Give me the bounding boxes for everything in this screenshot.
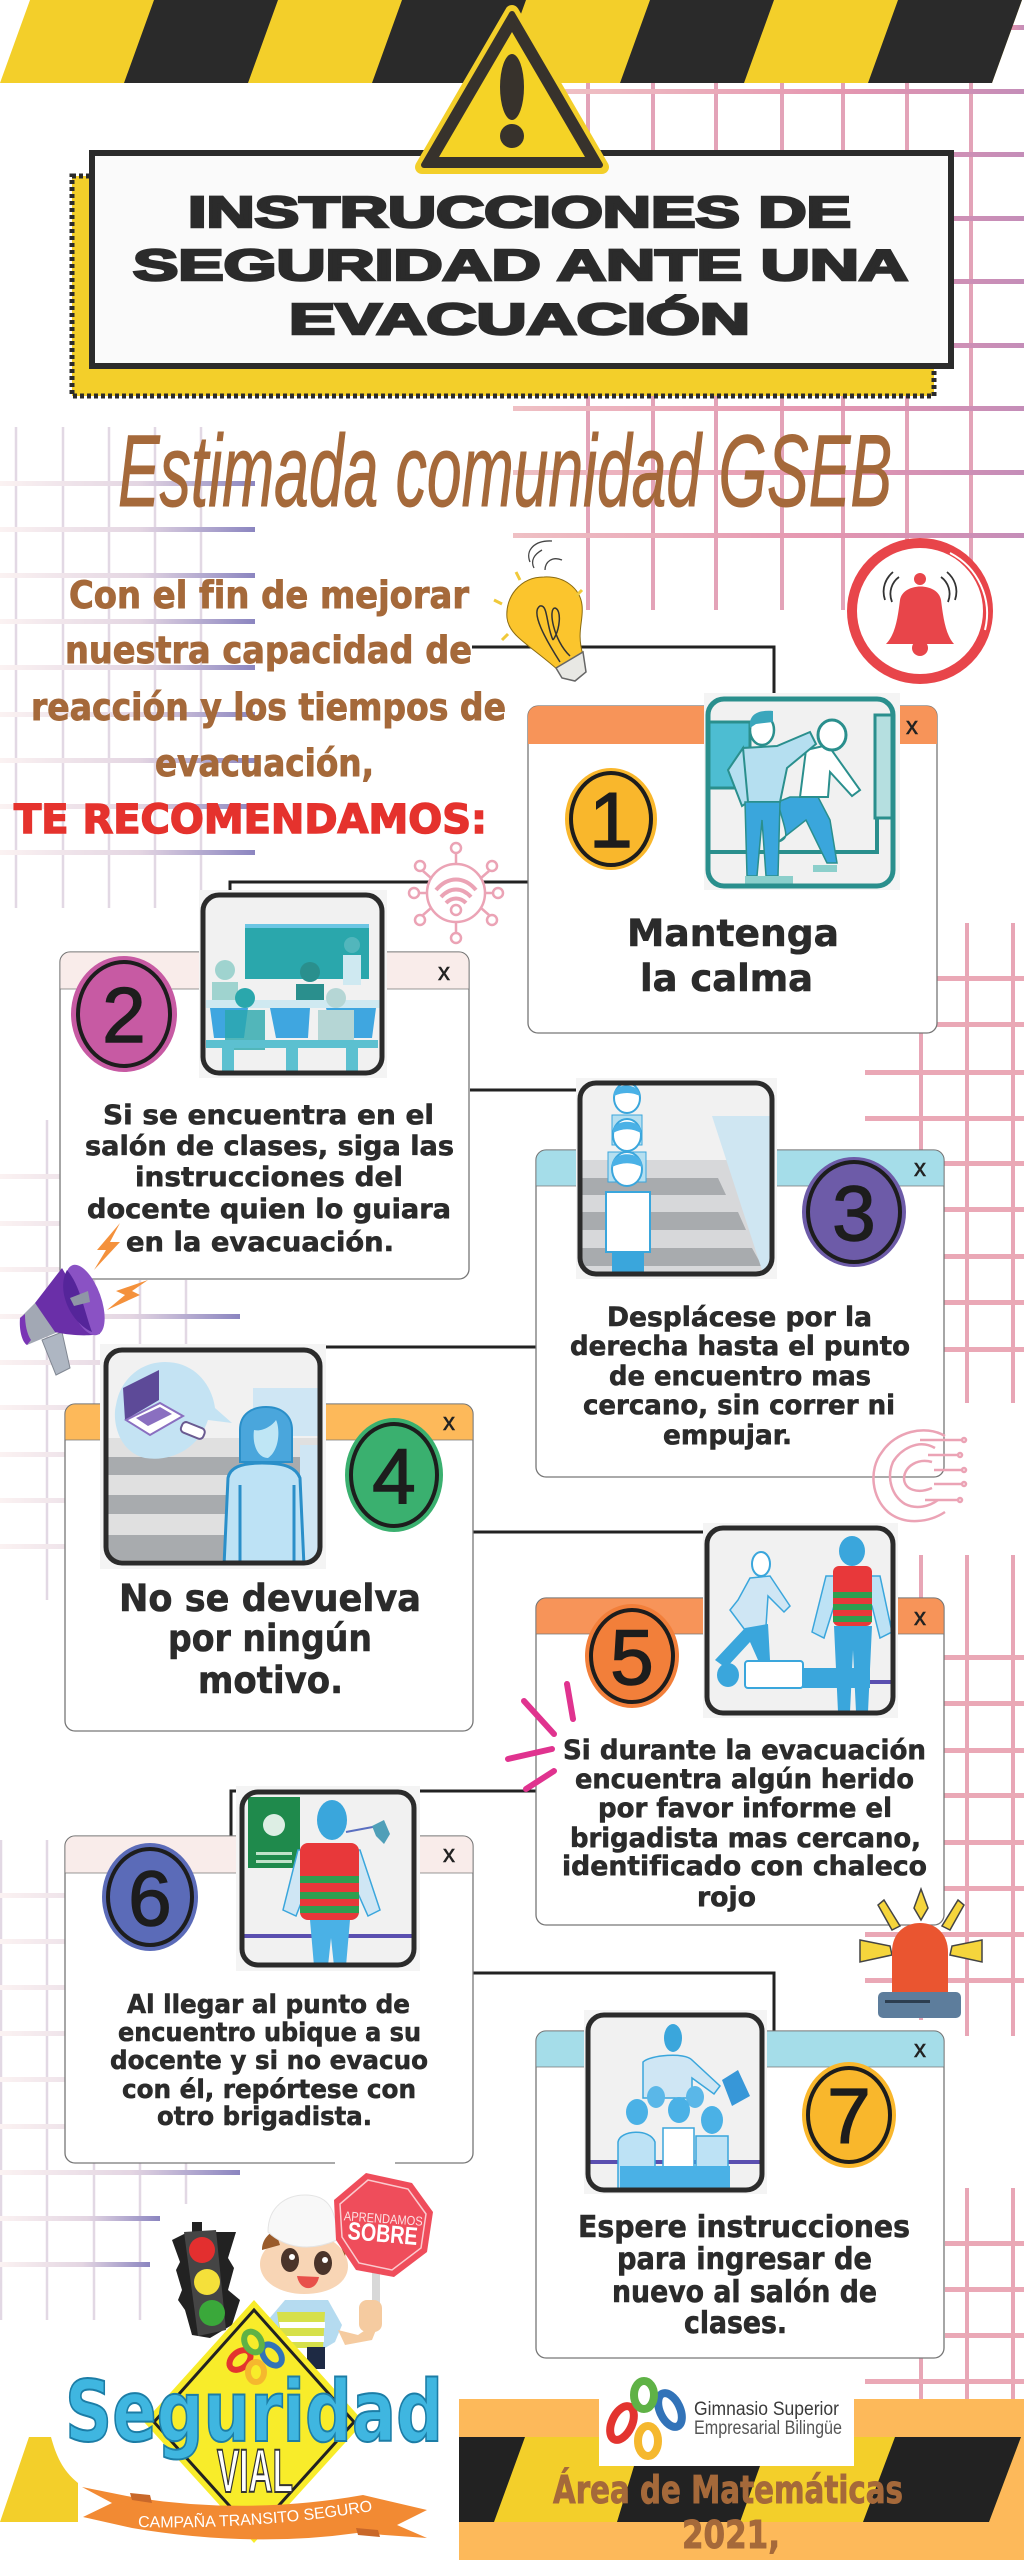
footer: right orange panel with hazard stripe [440, 2399, 1024, 2560]
step 7 illustration: wait for instructions [584, 2010, 767, 2194]
step 6 illustration: meeting point [236, 1786, 420, 1971]
step 7 text: clases. [684, 2306, 787, 2341]
step 5 text: brigadista mas cercano, [570, 1823, 921, 1854]
step 6 text: Al llegar al punto de [127, 1990, 410, 2020]
step 4 illustration: do not go back [100, 1344, 326, 1569]
step 7 text: nuevo al salón de [612, 2275, 877, 2310]
background grid: left lilac, third [0, 1840, 240, 2320]
step 6 number badge: 6 [128, 1854, 172, 1942]
icon: circuit gear [873, 1430, 966, 1521]
step 6 text: docente y si no evacuo [110, 2046, 428, 2076]
step 3 card [536, 1078, 944, 1477]
step 3 number badge [802, 1157, 906, 1267]
step 2 text [85, 1100, 454, 1258]
logo: Seguridad Vial campaign [65, 2300, 443, 2543]
step 7 number badge [802, 2062, 896, 2168]
step 1 card [528, 693, 937, 1033]
step 4 text: motivo. [198, 1659, 343, 1702]
icon: warning triangle [422, 12, 602, 167]
step 1 card: x [906, 713, 918, 740]
logo: Seguridad Vial campaign: VIAL [217, 2437, 293, 2505]
intro text: evacuación, [155, 742, 374, 785]
background grid: right pink, second [865, 923, 1024, 1403]
step 3 illustration: single file [576, 1078, 777, 1282]
title panel [92, 153, 951, 366]
step 6 card [65, 1786, 473, 2163]
step 6 number badge [102, 1843, 198, 1951]
step 5 text: por favor informe el [598, 1793, 892, 1824]
icon: light bulb [494, 541, 586, 681]
intro text: nuestra capacidad de [65, 629, 472, 672]
step 4 text: No se devuelva [119, 1577, 421, 1620]
step 5 text: identificado con chaleco [562, 1851, 927, 1882]
icon: alarm bell [852, 543, 988, 679]
step 6 text: otro brigadista. [157, 2102, 372, 2132]
title text: EVACUACIÓN [289, 294, 750, 344]
step 5 card: x [914, 1604, 926, 1631]
title text: INSTRUCCIONES DE [188, 188, 851, 237]
step 1 text: la calma [640, 957, 813, 1000]
step 4 card [65, 1344, 473, 1731]
step 7 text: para ingresar de [617, 2242, 872, 2277]
background grid: left lilac, second [0, 1120, 240, 1600]
step 2 text: salón de clases, siga las [85, 1131, 454, 1162]
step 6 text: con él, repórtese con [122, 2075, 416, 2105]
footer: left white backing [0, 2205, 459, 2560]
step 2 text: Si se encuentra en el [103, 1100, 434, 1131]
step 1 text [627, 912, 839, 1000]
intro text: reacción y los tiempos de [31, 686, 506, 729]
background grid: right pink, third [865, 1555, 1024, 2036]
icon: megaphone [20, 1260, 113, 1375]
stop sign: APRENDAMOS [343, 2208, 424, 2229]
step 3 text: cercano, sin correr ni [583, 1390, 895, 1421]
background grid: right pink, bottom [865, 2188, 1024, 2400]
step 3 number badge: 3 [832, 1169, 876, 1257]
step 1 illustration: calm walk [704, 693, 900, 890]
step 4 number badge: 4 [372, 1432, 416, 1520]
step 5 text: encuentra algún herido [575, 1764, 914, 1795]
step 5 text: rojo [697, 1882, 756, 1913]
step 5 text: Si durante la evacuación [563, 1735, 926, 1766]
school emblem, small [226, 2328, 286, 2382]
title text [133, 188, 908, 344]
step 7 text [578, 2210, 910, 2341]
logo: Gimnasio Superior Empresarial Bilingüe: Empresarial Bilingüe [694, 2418, 842, 2439]
connector lines between steps [230, 647, 774, 2033]
stop sign [334, 2173, 433, 2277]
logo: Seguridad Vial campaign: Seguridad [65, 2363, 443, 2462]
hazard stripe band: top [0, 0, 1022, 83]
step 5 card [536, 1523, 944, 1925]
icon: traffic light [172, 2222, 240, 2338]
icon: lightning bolts [94, 1223, 148, 1310]
step 7 card: x [914, 2036, 926, 2063]
icon: wifi network [409, 843, 503, 943]
step 5 illustration: injured person [703, 1523, 898, 1718]
footer: left hazard stripe fragment [0, 2437, 78, 2522]
recommendation callout: TE RECOMENDAMOS: [14, 797, 487, 843]
step 3 card: x [914, 1155, 926, 1182]
step 2 card [60, 890, 469, 1279]
illustration: child with stop sign [260, 2173, 433, 2369]
footer text: area and year [553, 2468, 903, 2557]
background grid: top right pink [513, 25, 1024, 610]
icon: alarm beacon [860, 1889, 982, 2018]
step 3 text [570, 1302, 910, 1451]
white backing of stop sign [335, 2160, 395, 2206]
step 4 text [119, 1577, 421, 1702]
logo: Gimnasio Superior Empresarial Bilingüe: Gimnasio Superior [694, 2399, 840, 2420]
step 2 text: docente quien lo guiara [87, 1194, 451, 1225]
intro text: Con el fin de mejorar [69, 574, 470, 617]
title text: SEGURIDAD ANTE UNA [133, 241, 908, 290]
step 7 text: Espere instrucciones [578, 2210, 910, 2245]
step 5 number badge [585, 1604, 679, 1708]
footer text: area and year: 2021, [682, 2513, 780, 2557]
background grid: upper left lilac [0, 427, 255, 908]
accent: pink spark lines [508, 1684, 573, 1789]
step 3 text: empujar. [663, 1420, 792, 1451]
step 7 card [536, 2010, 944, 2358]
stop sign: SOBRE [347, 2217, 419, 2251]
logo: Gimnasio Superior Empresarial Bilingüe [599, 2380, 854, 2466]
step 3 text: Desplácese por la [607, 1302, 872, 1333]
step 6 text: encuentro ubique a su [118, 2018, 421, 2048]
step 2 number badge: 2 [102, 971, 146, 1059]
step 2 number badge [71, 956, 177, 1072]
step 2 text: en la evacuación. [126, 1227, 394, 1258]
step 6 text [110, 1990, 428, 2132]
step 3 text: de encuentro mas [609, 1361, 871, 1392]
step 1 number badge: 1 [589, 776, 633, 864]
step 4 number badge [345, 1418, 443, 1532]
step 3 text: derecha hasta el punto [570, 1331, 910, 1362]
step 1 number badge [565, 768, 657, 870]
step 5 text [562, 1735, 927, 1913]
step 5 number badge: 5 [610, 1613, 654, 1701]
step 1 text: Mantenga [627, 912, 839, 955]
step 7 number badge: 7 [827, 2072, 871, 2160]
footer text: area and year: Área de Matemáticas [553, 2468, 903, 2512]
campaign ribbon: CAMPAÑA TRANSITO SEGURO [138, 2500, 372, 2528]
step 4 text: por ningún [168, 1617, 372, 1660]
step 2 illustration: classroom [199, 890, 387, 1078]
step 6 card: x [443, 1841, 455, 1868]
step 2 card: x [438, 959, 450, 986]
step 2 text: instrucciones del [135, 1162, 403, 1193]
title panel shadow with dotted edge [72, 176, 934, 396]
campaign ribbon [82, 2487, 427, 2540]
step 4 card: x [443, 1409, 455, 1436]
intro text [14, 574, 506, 843]
